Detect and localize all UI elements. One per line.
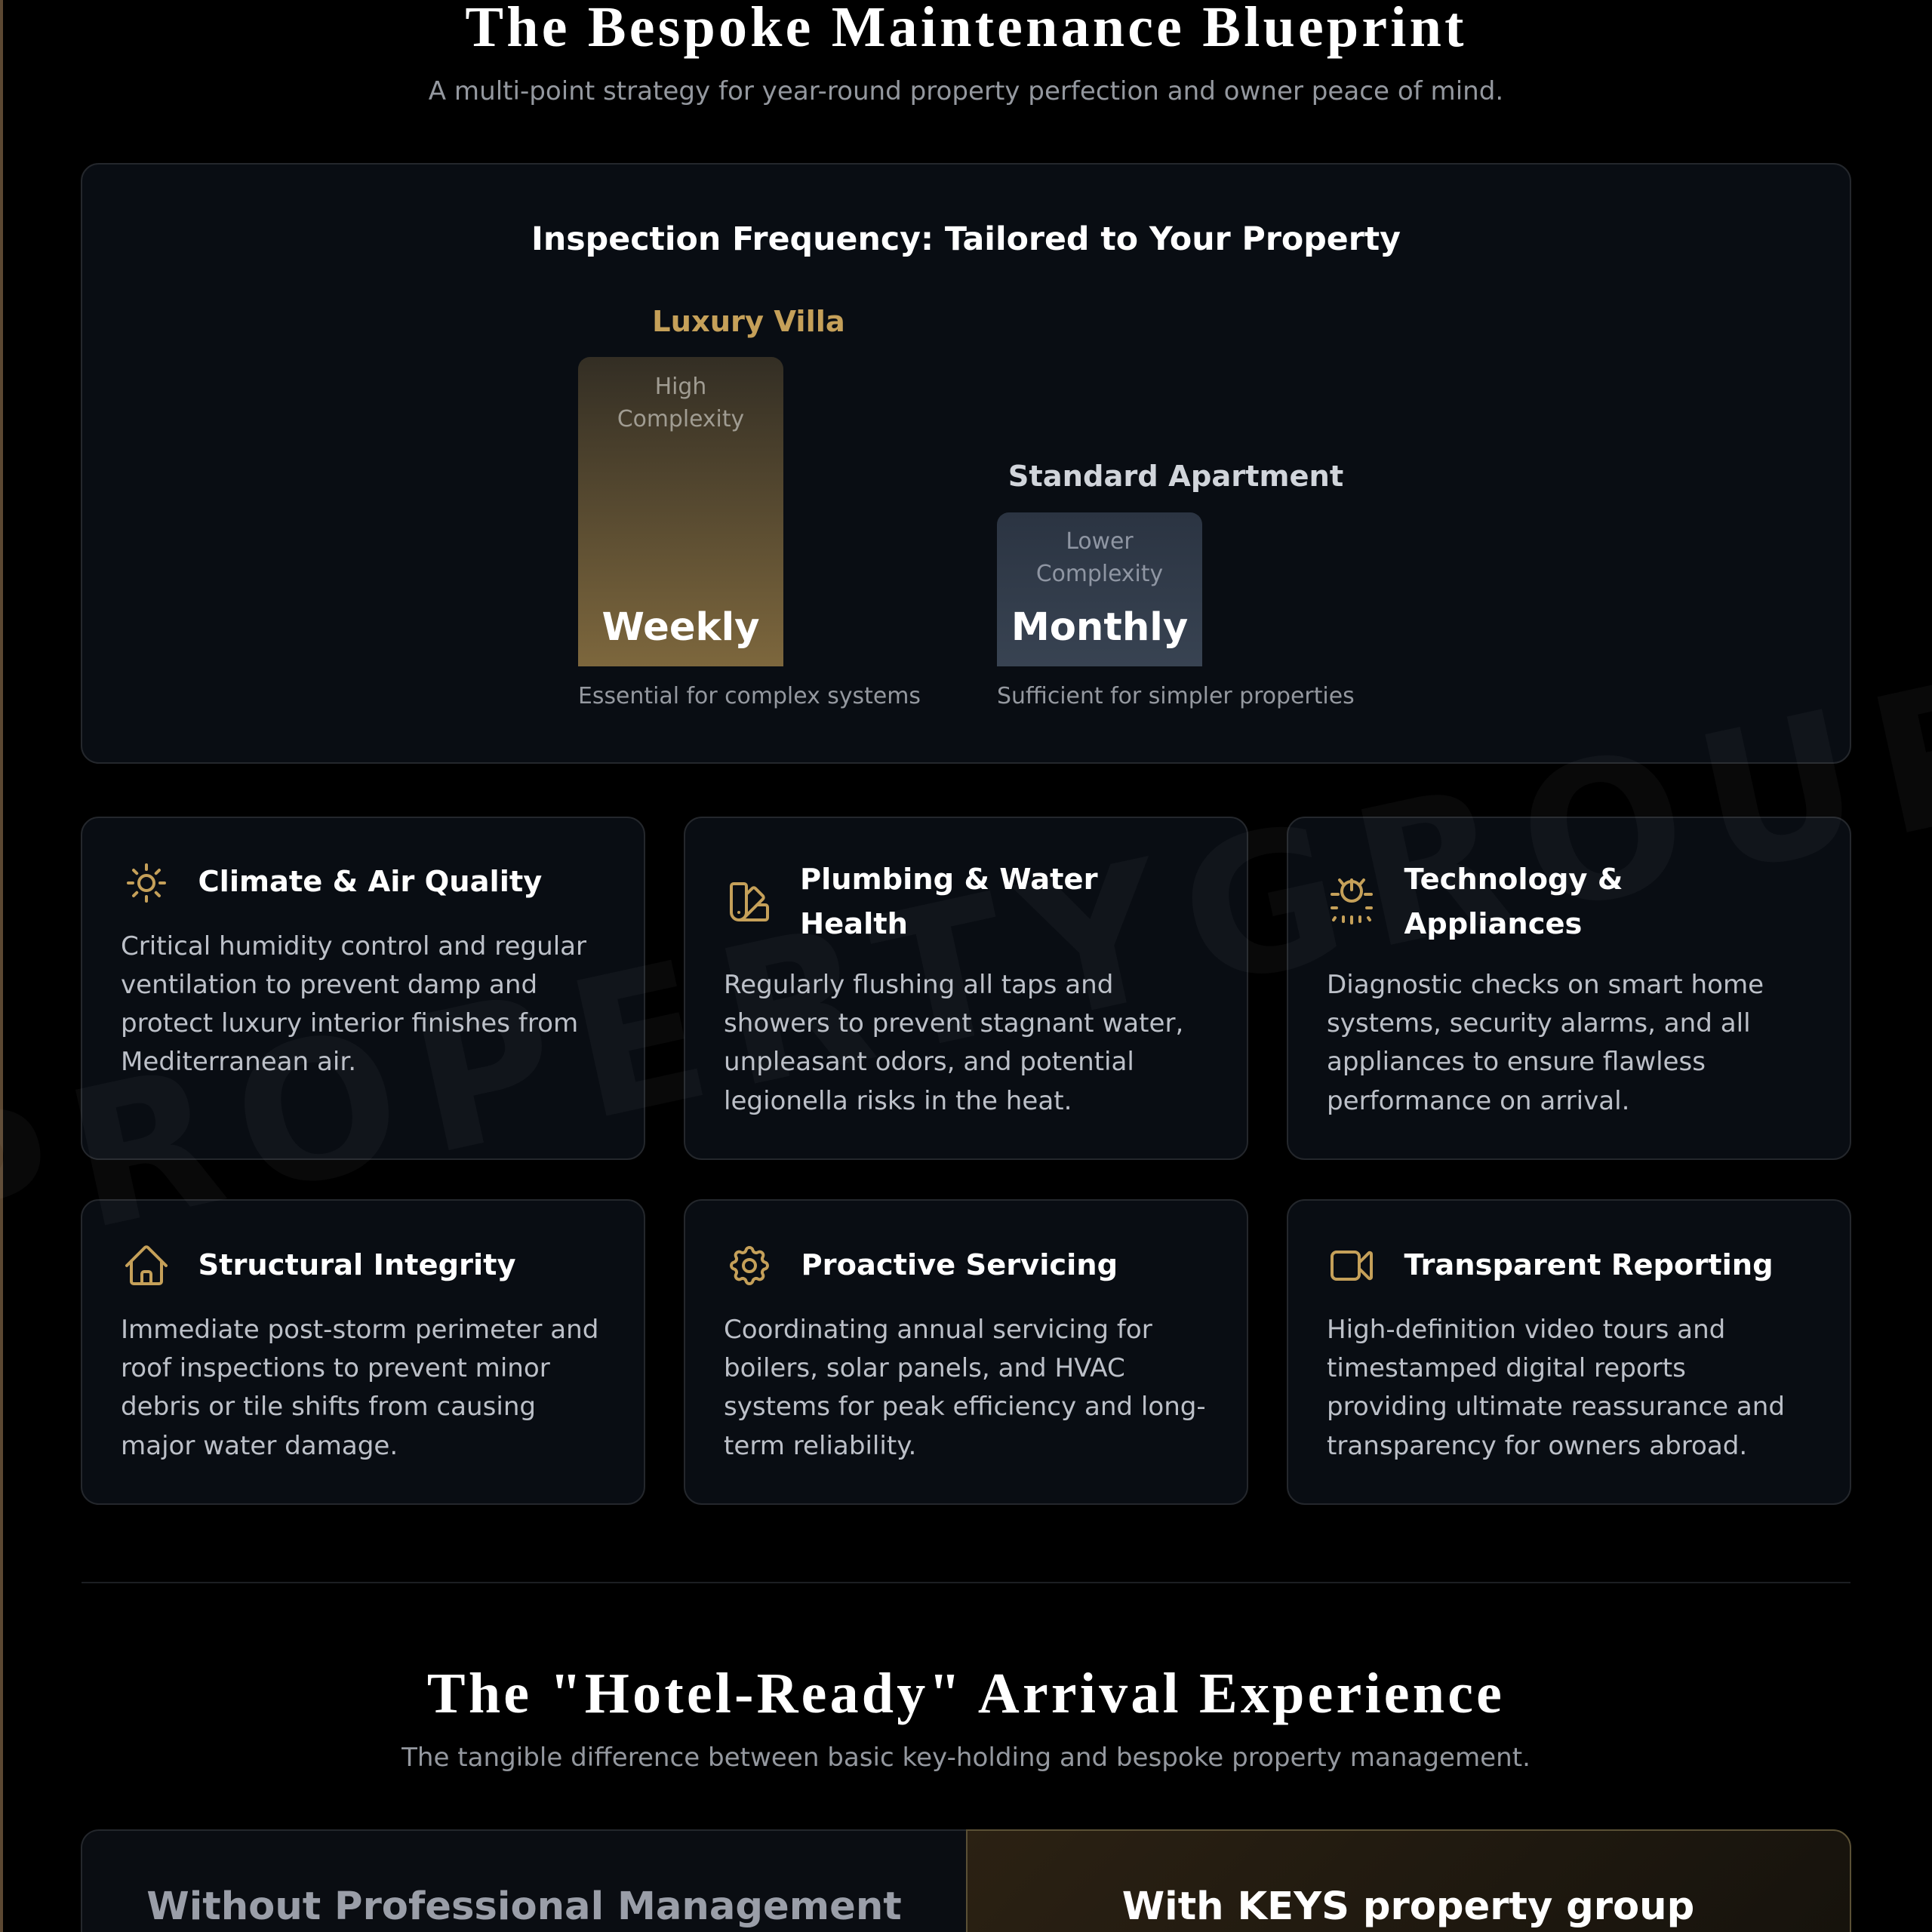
text: plumbing: unpleasant odors, and potential (724, 1047, 1134, 1077)
bar note: lower complexity (1036, 528, 1163, 587)
chart column: standard apartment (997, 459, 1355, 709)
bar note: high complexity: High (655, 373, 706, 400)
text: reporting: providing ultimate reassurance and (1327, 1392, 1785, 1422)
text: technology: performance on arrival. (1327, 1086, 1629, 1116)
text: proactive: systems for peak efficiency and long- (724, 1392, 1206, 1422)
text: structural (121, 1315, 598, 1461)
icon: power light (1331, 878, 1373, 924)
card: transparent reporting (1286, 1199, 1850, 1505)
heading: plumbing (800, 862, 1097, 941)
left accent border (0, 0, 3, 1932)
caption: luxury villa: Essential for complex systems (578, 682, 921, 709)
subtitle: maintenance blueprint: A multi-point strategy for year-round property perfection and owner peace of mind. (429, 76, 1503, 106)
card: climate and air quality (81, 817, 645, 1160)
column: with keys (966, 1829, 1851, 1932)
icon: sun (127, 863, 166, 903)
icon: gear (730, 1246, 769, 1285)
text: reporting: High-definition video tours and (1327, 1315, 1725, 1345)
caption: standard apartment: Sufficient for simpler properties (997, 682, 1355, 709)
text: proactive: boilers, solar panels, and HVAC (724, 1353, 1125, 1383)
text: climate: Mediterranean air. (121, 1047, 356, 1077)
card: plumbing and water health (684, 817, 1248, 1160)
text: climate: Critical humidity control and regular (121, 931, 586, 961)
bar: weekly (578, 357, 783, 666)
text: technology: appliances to ensure flawless (1327, 1047, 1706, 1077)
icon: swatch (730, 882, 769, 921)
text: plumbing: Regularly flushing all taps and (724, 970, 1113, 1000)
text: plumbing: showers to prevent stagnant water, (724, 1008, 1183, 1038)
heading: structural: Structural Integrity (198, 1248, 516, 1281)
title: hotel-ready arrival: The "Hotel-Ready" Arrival Experience (427, 1662, 1505, 1725)
card: proactive servicing (684, 1199, 1248, 1505)
panel: inspection frequency (81, 163, 1851, 764)
text: proactive: Coordinating annual servicing for (724, 1315, 1152, 1345)
column: without management (81, 1829, 966, 1932)
subtitle: hotel-ready arrival: The tangible difference between basic key-holding and bespoke property management. (401, 1743, 1531, 1773)
text: climate (121, 931, 586, 1077)
text: technology: systems, security alarms, and all (1327, 1008, 1751, 1038)
heading: climate: Climate & Air Quality (198, 865, 542, 899)
text: plumbing: legionella risks in the heat. (724, 1086, 1072, 1116)
text: structural: roof inspections to prevent minor (121, 1353, 550, 1383)
card: structural integrity (81, 1199, 645, 1505)
bar note: lower complexity: Complexity (1036, 561, 1163, 587)
text: structural: major water damage. (121, 1431, 398, 1461)
text: reporting (1327, 1315, 1785, 1461)
icon: video camera (1331, 1251, 1373, 1281)
heading: technology: Appliances (1404, 907, 1582, 941)
label: standard apartment: Standard Apartment (1008, 459, 1343, 494)
bar value: monthly: Monthly (1011, 604, 1188, 649)
text: reporting: timestamped digital reports (1327, 1353, 1686, 1383)
bar: monthly (997, 512, 1202, 666)
icon: house (125, 1245, 168, 1285)
card: technology and appliances (1286, 817, 1850, 1160)
text: technology (1327, 970, 1764, 1116)
bar note: high complexity (617, 373, 744, 432)
heading: technology (1404, 862, 1623, 941)
text: structural: debris or tile shifts from causing (121, 1392, 536, 1422)
text: climate: protect luxury interior finishes from (121, 1008, 578, 1038)
bar note: lower complexity: Lower (1066, 528, 1134, 555)
text: proactive: term reliability. (724, 1431, 916, 1461)
heading: without management: Without Professional Management (146, 1884, 902, 1929)
heading: plumbing: Health (800, 907, 908, 941)
text: climate: ventilation to prevent damp and (121, 970, 537, 1000)
bar note: high complexity: Complexity (617, 406, 744, 432)
heading: technology: Technology & (1404, 862, 1623, 897)
heading: with keys: With KEYS property group (1122, 1884, 1694, 1929)
text: structural: Immediate post-storm perimeter and (121, 1315, 598, 1345)
label: luxury villa: Luxury Villa (652, 305, 845, 338)
text: reporting: transparency for owners abroad. (1327, 1431, 1747, 1461)
chart column: luxury villa (578, 305, 921, 709)
text: technology: Diagnostic checks on smart home (1327, 970, 1764, 1000)
heading: inspection frequency: Inspection Frequency: Tailored to Your Property (531, 220, 1401, 258)
text: plumbing (724, 970, 1183, 1116)
heading: proactive: Proactive Servicing (801, 1248, 1118, 1281)
heading: reporting: Transparent Reporting (1404, 1248, 1774, 1281)
panel: comparison (81, 1829, 1851, 1932)
bar value: weekly: Weekly (601, 604, 760, 649)
heading: plumbing: Plumbing & Water (800, 862, 1097, 897)
text: proactive (724, 1315, 1206, 1461)
